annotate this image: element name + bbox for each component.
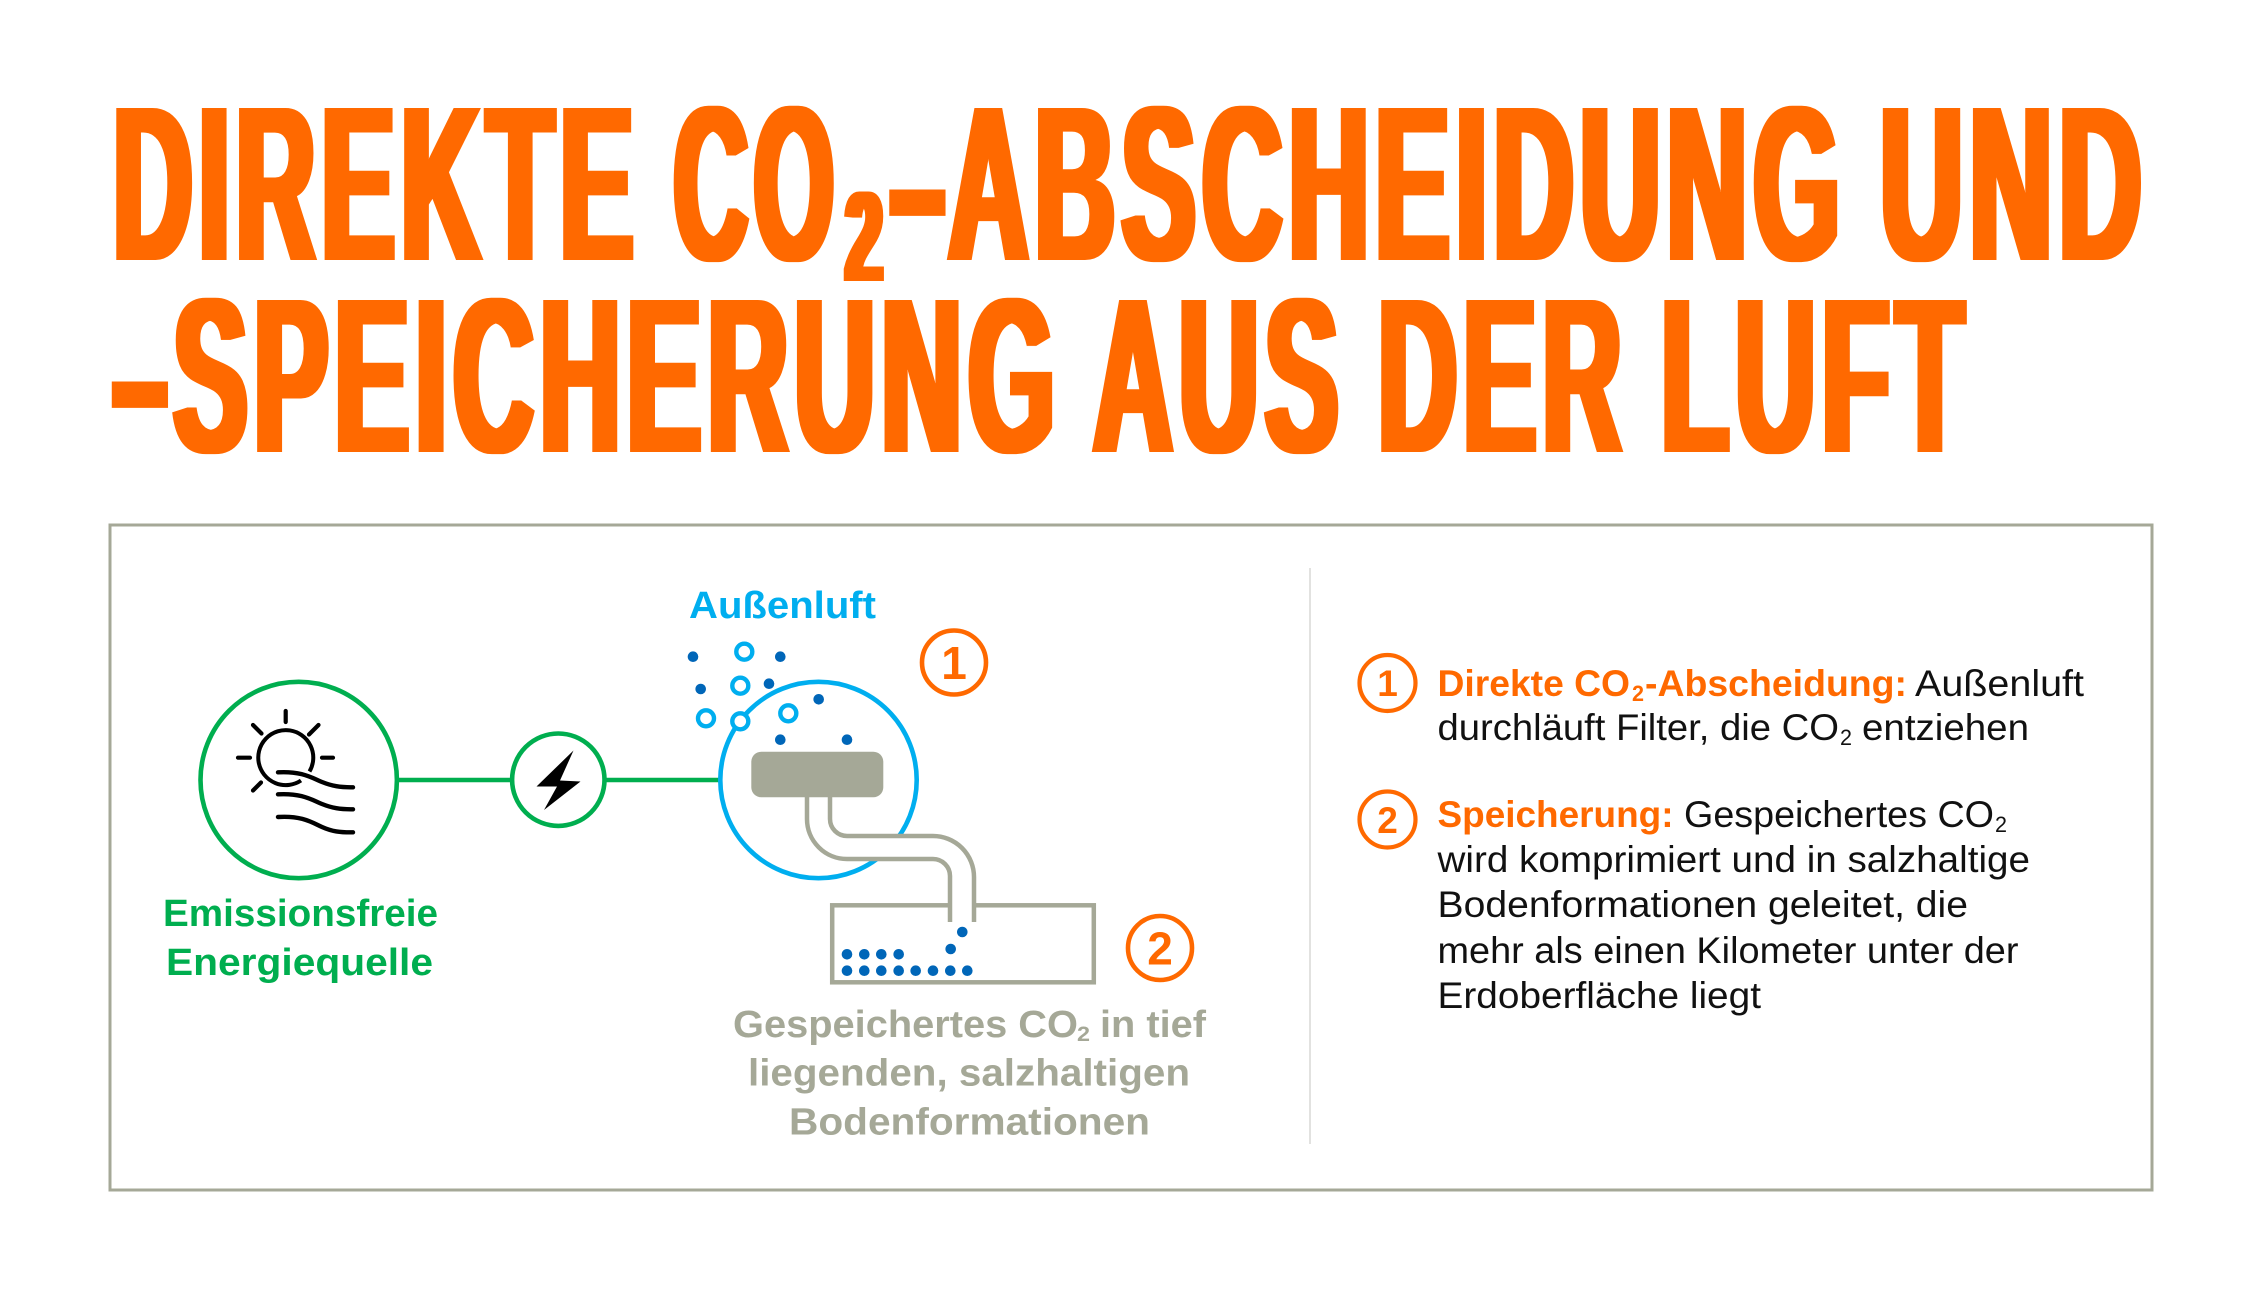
title: - [109,252,171,499]
text block: step 1: 2 [1840,725,1852,750]
text block: step 2: Erdoberfläche liegt [1438,975,1762,1016]
badge: step 1: 1 [1377,663,1398,704]
text block: step 1: Außenluft [1915,663,2085,704]
connector line [395,778,722,782]
diagram: direct air capture process [201,630,1192,982]
text block: step 1: Direkte CO [1438,663,1630,704]
icon: lightning bolt in green circle [512,734,604,826]
label: emission-free energy source: Emissionsfreie [163,893,438,935]
text block: step 2: Speicherung: [1438,794,1674,835]
badge: step 2 [1360,792,1416,848]
title: CO [674,60,840,307]
panel: process frame [110,525,2152,1190]
label: stored CO2 in saline formations: Gespeichertes CO [733,1004,1078,1046]
title: AUS [1094,252,1345,499]
filter block [751,752,883,797]
title: - [886,60,948,307]
badge 1 [922,630,986,694]
text block: step 2 [1360,792,2030,1016]
text block: step 2: wird komprimiert und in salzhaltige [1436,839,2030,880]
storage formation box [832,905,1094,982]
text block: step 2: Gespeichertes CO [1684,794,1994,835]
badge 2 [1128,916,1192,980]
label: emission-free energy source: Energiequelle [166,942,433,984]
text block: step 2: Bodenformationen geleitet, die [1438,884,1968,925]
title: 2 [846,166,882,309]
badge 2: 2 [1147,922,1173,974]
title [109,60,2148,499]
text block: step 1: -Abscheidung: [1645,663,1907,704]
text block: step 2: 2 [1995,812,2007,837]
title: SPEICHERUNG [174,252,1062,499]
title: DIREKTE [114,60,640,307]
text block: step 2: mehr als einen Kilometer unter der [1438,930,2018,971]
label: stored CO2 in saline formations: 2 [1077,1023,1090,1046]
label: emission-free energy source [163,893,438,984]
badge 1: 1 [941,637,967,689]
text block: step 1: entziehen [1862,707,2029,748]
label: stored CO2 in saline formations: in tief [1100,1004,1206,1046]
icon: sun and wind in green circle [201,682,397,878]
label: stored CO2 in saline formations: Bodenformationen [789,1102,1150,1144]
badge: step 1 [1360,655,1416,711]
stored CO2 dots [842,927,973,976]
icon: capture circle with filter and air molecules [688,644,917,878]
label: Außenluft: Außenluft [689,585,876,627]
text block: step 1 [1360,655,2085,750]
text block: step 1: 2 [1632,681,1644,706]
label: stored CO2 in saline formations: liegenden, salzhaltigen [748,1052,1190,1094]
label: stored CO2 in saline formations [733,1004,1206,1144]
badge: step 2: 2 [1377,800,1398,841]
title: DER [1378,252,1628,499]
text block: step 1: durchläuft Filter, die CO [1438,707,1839,748]
pipe from filter to storage [807,797,974,922]
